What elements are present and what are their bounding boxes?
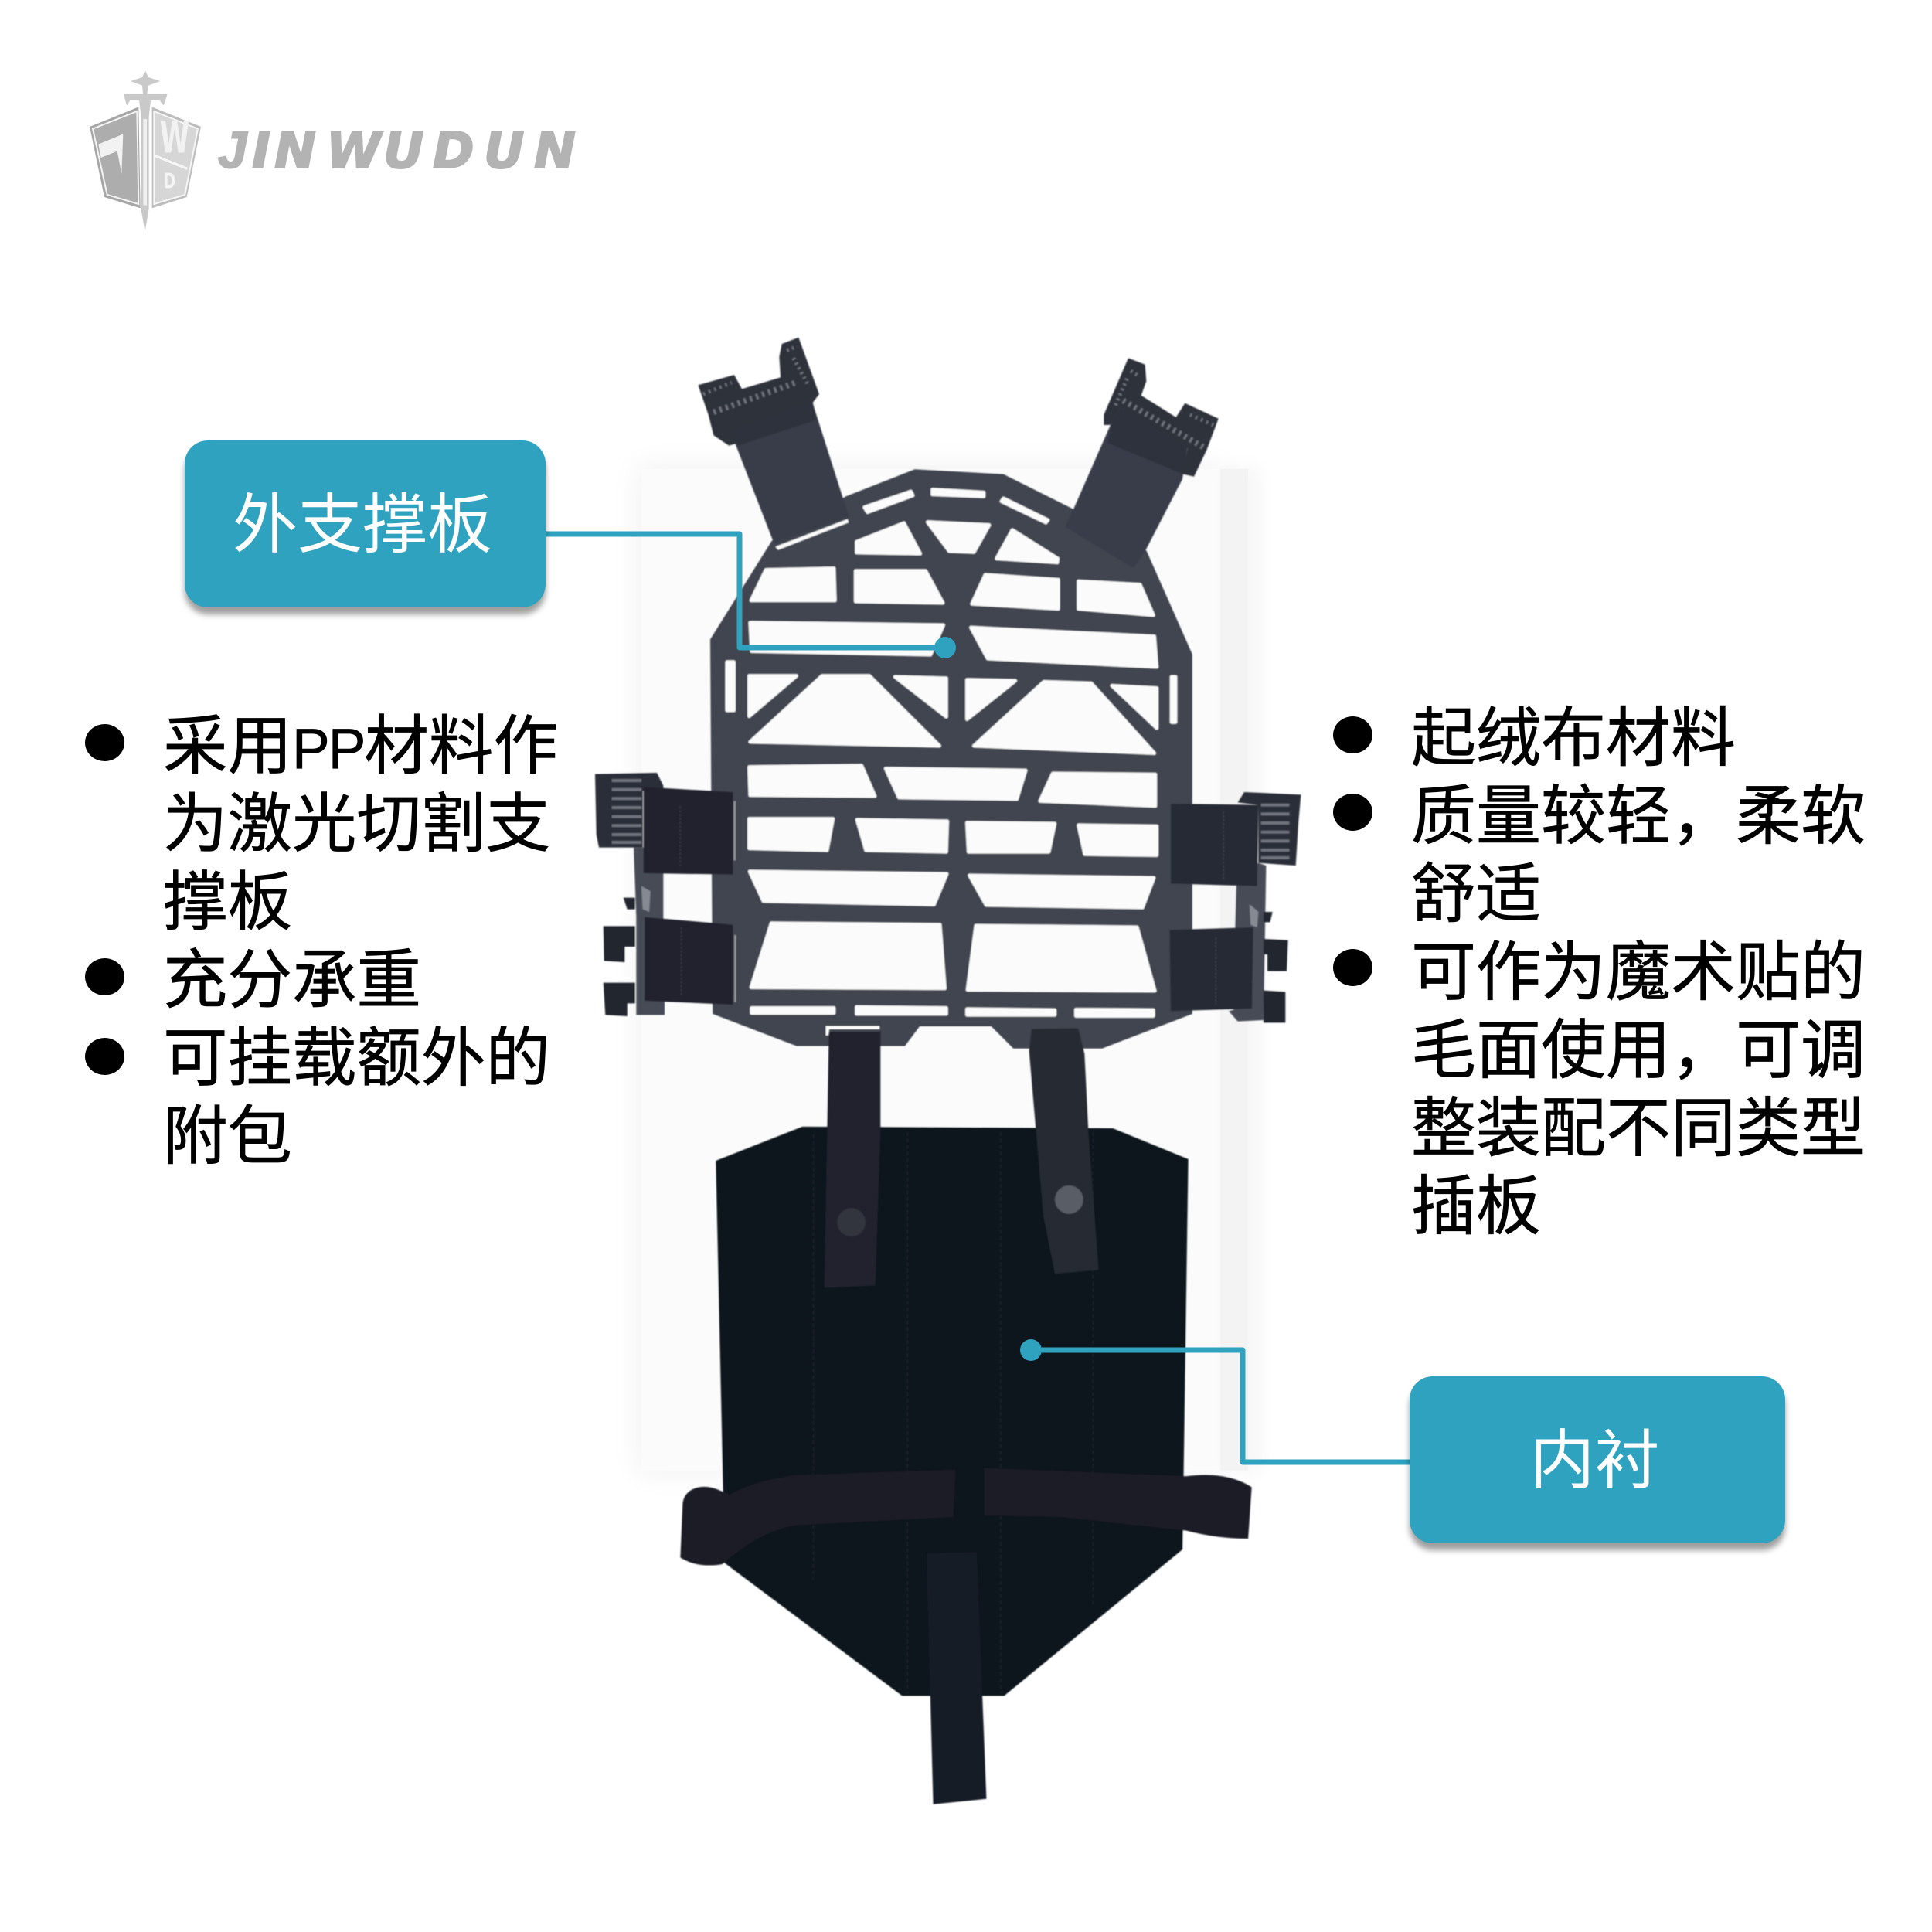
right shoulder strap: [1065, 358, 1219, 568]
left bullet 3: [85, 1038, 124, 1075]
connector: support plate callout to plate: [546, 534, 956, 658]
right text block: lining features: 整装配不同类型: [1411, 1092, 1866, 1165]
wordmark: J: [218, 121, 248, 179]
right hanging strap: [1029, 1029, 1099, 1274]
connector: lining callout to lining: [1020, 1339, 1410, 1462]
left snap button: [837, 1208, 866, 1236]
left text block: support plate features: 撑板: [163, 866, 292, 938]
right snap button: [1055, 1185, 1083, 1214]
right bullet 3: [1333, 949, 1372, 986]
right text block: lining features: 舒适: [1411, 858, 1541, 930]
left elastic bands: [644, 787, 735, 1005]
right text block: lining features: 质量较轻，柔软: [1411, 780, 1866, 852]
right buckle post: [1229, 863, 1266, 1022]
right waist belt: [985, 1468, 1252, 1539]
left top buckle: [595, 773, 663, 848]
left text block: support plate features: 充分承重: [163, 944, 421, 1016]
right text block: lining features: 毛面使用，可调: [1411, 1014, 1866, 1087]
logo: JINWUDUN emblem and wordmark: [90, 70, 576, 232]
left hanging strap: [825, 1032, 880, 1288]
center bottom strap: [927, 1553, 986, 1804]
photo backdrop right band: [1220, 469, 1248, 1471]
callout: 内衬: [1410, 1376, 1785, 1543]
right text block: lining features: 起绒布材料: [1411, 702, 1736, 774]
left bullet 2: [85, 958, 124, 995]
left text block: support plate features: [163, 709, 558, 1172]
right lower buckle teeth: [1264, 912, 1288, 1022]
left lower buckle teeth: [604, 898, 635, 1016]
plate cut-outs: [727, 489, 1175, 1016]
left shoulder strap: [698, 338, 849, 550]
lining: inner pad with straps: [680, 1127, 1252, 1804]
right top buckle: [1238, 792, 1301, 866]
callout: 外支撑板: 外支撑板: [233, 488, 492, 561]
left side buckles and elastic bands: [595, 773, 735, 1016]
right text block: lining features: 插板: [1411, 1170, 1541, 1243]
icon: sword and shield emblem: W: [160, 113, 189, 164]
hanging straps with snap buttons: [825, 1026, 1099, 1288]
left text block: support plate features: 采用PP材料作: [163, 709, 558, 782]
callout: 外支撑板: [185, 440, 546, 607]
white sliver above left strap: [825, 1026, 879, 1036]
right side buckles and elastic bands: [1169, 792, 1301, 1022]
support plate: outer laser-cut panel: [595, 338, 1301, 1049]
left buckle post: [634, 848, 665, 1015]
left bullet 1: [85, 724, 124, 761]
right bullet 1: [1333, 716, 1372, 753]
icon: sword and shield emblem: [90, 70, 201, 232]
right elastic bands: [1169, 804, 1258, 1011]
right bullet 2: [1333, 794, 1372, 831]
icon: sword and shield emblem: D: [163, 168, 175, 193]
callout: 内衬: 内衬: [1529, 1423, 1660, 1496]
right text block: lining features: [1411, 702, 1866, 1243]
left text block: support plate features: 可挂载额外的: [163, 1022, 550, 1094]
left waist belt: [680, 1470, 955, 1566]
right text block: lining features: 可作为魔术贴的: [1411, 936, 1866, 1009]
left text block: support plate features: 附包: [163, 1100, 292, 1172]
plate body: [710, 469, 1192, 1049]
wordmark: INWUDUN: [252, 122, 576, 180]
left text block: support plate features: 为激光切割支: [163, 787, 550, 860]
photo backdrop panel: [641, 469, 1220, 1471]
lining fabric: [716, 1127, 1189, 1696]
